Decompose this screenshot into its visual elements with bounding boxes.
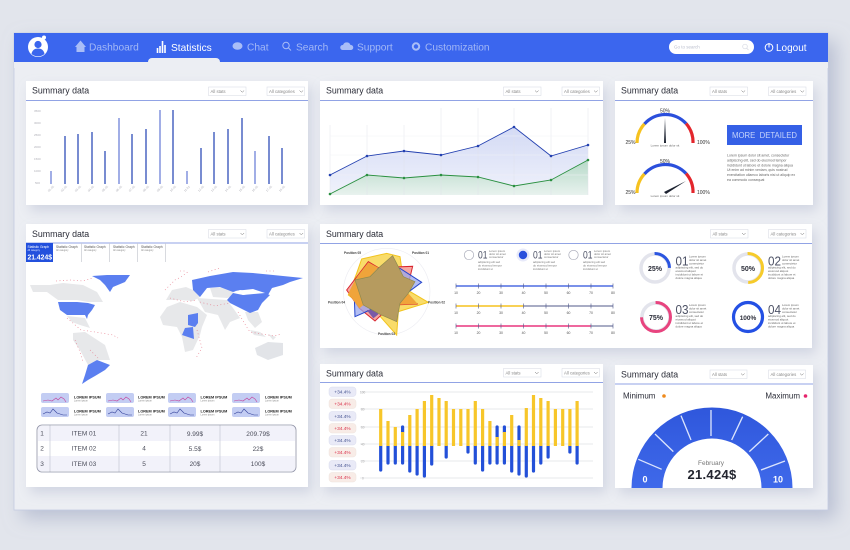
gauge: lower — [626, 159, 710, 198]
donut: 75% — [642, 302, 688, 332]
nav item: Dashboard — [75, 40, 139, 54]
nav item: Chat: Chat — [247, 42, 269, 54]
dropdown: stats: All stats — [712, 372, 727, 377]
stat tabs: All category — [56, 249, 69, 252]
text block: 03: consectetur — [689, 310, 704, 314]
radar chart — [328, 248, 445, 336]
bar chart: yellow and blue: 20 — [361, 460, 365, 464]
sparklines: LOREM IPSUM — [265, 410, 292, 414]
option selectors — [464, 248, 611, 271]
y axis labels: 2500 — [34, 133, 41, 137]
sparklines: LOREM IPSUM — [265, 396, 292, 400]
donut: 25%: 25% — [648, 266, 663, 273]
percentage pills: +34.4% — [334, 438, 351, 444]
option selectors: do eiusmod tempor — [478, 264, 502, 268]
top navigation bar — [14, 33, 828, 68]
radar chart: Position 03 — [378, 332, 395, 336]
button: more detailed: MORE DETAILED — [732, 131, 797, 140]
slider: yellow: 20 — [477, 311, 480, 315]
x axis labels: 15.01 — [238, 184, 246, 193]
stat tabs: Statistic Graph — [113, 245, 135, 249]
legend: maximum: Maximum — [765, 392, 800, 400]
text block: 04: dolor sit amet — [782, 306, 800, 310]
x axis labels: 17.01 — [265, 184, 273, 193]
slider: pink: 60 — [567, 331, 570, 335]
percentage pills — [329, 387, 356, 482]
text block: exercitation ullamco laboris nisi ut aliquip ex — [727, 173, 795, 177]
y axis labels: 3000 — [34, 121, 41, 125]
text block: 04: incididunt ut labore et — [768, 321, 796, 325]
slider: yellow: 80 — [611, 311, 615, 315]
slider: pink: 20 — [477, 331, 480, 335]
sparklines: Lorem ipsum — [200, 400, 214, 402]
text block: 01: consectetur — [689, 262, 704, 266]
text block: 01: incididunt ut labore et — [676, 272, 703, 276]
stat tabs: Statistic Graph — [141, 245, 163, 249]
option selectors: dolor sit amet — [594, 252, 611, 256]
text block: 04: eiusmod aliquot — [768, 318, 788, 322]
percentage pills: +34.4% — [334, 414, 351, 420]
panel: stacked bars — [320, 364, 603, 487]
gauge: lower: 50% — [660, 159, 671, 165]
dropdown: categories: All categories — [564, 370, 590, 376]
text block: 01: dolor sit amet — [689, 258, 707, 262]
text block — [727, 154, 795, 182]
dropdown: categories: All categories — [770, 232, 796, 236]
option selectors: consectetur — [544, 255, 559, 259]
option selectors: incididunt ut — [478, 267, 493, 271]
dropdown: stats: All stats — [506, 370, 521, 376]
option selectors: dolor sit amet — [489, 252, 506, 256]
percentage pills: +34.4% — [334, 463, 351, 469]
donut: 100% — [734, 302, 781, 332]
data table: ITEM 01 — [72, 430, 97, 438]
slider: blue: 30 — [499, 291, 503, 295]
sparklines: Lorem ipsum — [265, 414, 279, 416]
sparklines: Lorem ipsum — [74, 414, 88, 416]
panel: world map and table — [26, 224, 308, 487]
stat tabs: All category — [141, 249, 154, 252]
data table: ITEM 02 — [72, 446, 97, 452]
donut: 50%: 02 — [768, 254, 781, 268]
slider: yellow: 50 — [544, 311, 548, 315]
dropdown: categories: All categories — [269, 89, 295, 94]
text block: ea commodo consequat — [727, 178, 764, 182]
sparklines: LOREM IPSUM — [74, 410, 101, 414]
option selectors: do eiusmod tempor — [533, 264, 557, 268]
option selectors: 01 — [478, 250, 488, 262]
sparklines: LOREM IPSUM — [200, 396, 227, 400]
x axis labels: 06.01 — [115, 184, 123, 193]
bar chart: yellow and blue: 100 — [360, 390, 366, 394]
text block: 03: eiusmod aliquot — [676, 318, 696, 322]
sparklines: LOREM IPSUM — [138, 410, 165, 414]
x axis labels: 14.01 — [224, 184, 232, 193]
x axis labels: 03.01 — [74, 184, 82, 193]
nav item: Customization: Customization — [425, 42, 490, 54]
dropdown: stats — [504, 87, 541, 96]
bar chart: yellow and blue: 80 — [361, 408, 365, 412]
nav item: Support: Support — [357, 42, 393, 54]
sparklines: Lorem ipsum — [200, 414, 214, 416]
world map — [30, 268, 303, 384]
dropdown: stats: All stats — [210, 232, 226, 236]
option selectors: Lorem ipsum — [544, 249, 561, 253]
data table: 2 — [40, 446, 44, 452]
search box: Go to search — [674, 44, 700, 50]
text block: Lorem ipsum dolor sit amet, consectetur — [727, 154, 790, 158]
stat tabs: All category — [28, 249, 41, 252]
option selectors: incididunt ut — [533, 267, 548, 271]
x axis labels: 18.01 — [278, 184, 286, 193]
donut: 100%: 04 — [768, 302, 781, 317]
slider: blue: 60 — [567, 291, 570, 295]
text block: 03: Lorem ipsum — [689, 303, 706, 307]
stat tabs — [26, 243, 166, 262]
slider: yellow — [454, 304, 615, 315]
heading: Summary data — [32, 86, 89, 96]
dropdown: stats: All stats — [712, 89, 727, 94]
data table: 209.79$ — [246, 431, 270, 438]
stat tabs: 21.424$ — [28, 254, 52, 262]
text block: incididunt ut labore et dolore magna aliqua — [727, 163, 793, 167]
panel: area line chart — [320, 81, 603, 205]
heading: Summary data — [326, 229, 383, 239]
sparklines: Lorem ipsum — [138, 400, 152, 402]
dropdown: categories — [267, 87, 304, 96]
x axis labels: 01.01 — [47, 184, 55, 193]
stat tabs: Statistic Graph — [84, 245, 106, 249]
sparklines: LOREM IPSUM — [74, 396, 101, 400]
option selectors: adipiscing elit sed — [478, 260, 501, 264]
gauge: upper: 25% — [626, 140, 636, 146]
donut: 75%: 75% — [649, 315, 664, 322]
x axis labels: 11.01 — [183, 184, 191, 193]
semicircle gauge: 10 — [773, 474, 783, 484]
gauge: lower: Lorem ipsum dolor sit — [651, 194, 680, 198]
search box — [669, 40, 754, 54]
option selectors: do eiusmod tempor — [583, 264, 607, 268]
option selectors: Lorem ipsum — [489, 249, 506, 253]
icon: user avatar — [28, 36, 48, 57]
x axis labels — [47, 184, 286, 193]
button: more detailed — [727, 125, 802, 145]
slider: blue: 40 — [522, 291, 525, 295]
dropdown: stats — [710, 230, 748, 238]
donut: 25% — [640, 254, 688, 282]
dropdown: stats: All stats — [506, 89, 521, 94]
data table — [37, 425, 296, 472]
donut: 50%: 50% — [741, 266, 756, 273]
data table: 5.5$ — [189, 446, 202, 453]
panel: gauges — [615, 81, 813, 205]
slider: pink — [454, 324, 615, 335]
sparklines — [41, 393, 292, 417]
semicircle gauge — [632, 408, 792, 488]
option selectors: 01 — [533, 250, 542, 262]
slider: pink: 40 — [522, 331, 525, 335]
text block: 04: dolore magna aliqua — [768, 324, 795, 328]
stat tabs: All category — [113, 249, 126, 252]
x axis labels: 09.01 — [156, 184, 164, 193]
dropdown: categories: All categories — [564, 89, 590, 94]
semicircle gauge: February — [698, 460, 725, 467]
text block: 02: consectetur — [782, 262, 797, 266]
option selectors: incididunt ut — [583, 267, 598, 271]
nav item: Chat — [232, 42, 269, 54]
text block: Ut enim ad minim veniam, quis nostrud — [727, 168, 788, 172]
dropdown: stats — [710, 370, 747, 378]
slider: yellow: 10 — [454, 311, 458, 315]
percentage pills: +34.4% — [334, 426, 351, 432]
data table: 1 — [40, 430, 44, 438]
option selectors: dolor sit amet — [544, 252, 561, 256]
data table: 4 — [142, 446, 146, 452]
text block: 03: adipiscing elit, sed do — [676, 314, 704, 318]
x axis labels: 07.01 — [128, 184, 136, 193]
gauge: upper: 50% — [660, 108, 671, 114]
slider: pink: 10 — [454, 331, 458, 335]
radar chart: Position 04 — [328, 300, 345, 304]
data table: 21 — [140, 430, 148, 438]
bar chart: yellow and blue: 40 — [361, 442, 365, 446]
text block: 01: adipiscing elit, sed do — [676, 266, 704, 270]
slider: blue: 70 — [589, 291, 593, 295]
option selectors: adipiscing elit sed — [533, 260, 556, 264]
text block: 01: dolore magna aliqua — [676, 276, 702, 280]
semicircle gauge: 21.424$ — [687, 467, 737, 482]
slider: blue: 80 — [611, 291, 615, 295]
x axis labels: 05.01 — [101, 184, 109, 193]
slider: blue: 50 — [544, 291, 548, 295]
text block: 01: eiusmod aliquot — [676, 269, 696, 273]
bars — [51, 110, 282, 184]
heading: Summary data — [621, 370, 678, 380]
text block: 02: dolor sit amet — [782, 258, 800, 262]
text block: adipiscing elit, sed do eiusmod tempor — [727, 158, 787, 162]
text block: 02: dolore magna aliqua — [768, 276, 795, 280]
data table: ITEM 03 — [72, 461, 97, 468]
option selectors: adipiscing elit sed — [583, 260, 606, 264]
legend: minimum: Minimum — [623, 392, 656, 400]
sparklines: Lorem ipsum — [265, 400, 279, 402]
dropdown: categories — [267, 230, 304, 238]
donut: 50% — [734, 254, 781, 282]
gauge: lower: 25% — [626, 190, 636, 196]
percentage pills: +34.4% — [334, 475, 351, 481]
line chart — [329, 108, 589, 195]
semicircle gauge: 0 — [642, 474, 648, 484]
data table: 5 — [142, 461, 146, 468]
dropdown: stats — [208, 87, 246, 96]
slider: yellow: 70 — [589, 311, 593, 315]
data table: 3 — [40, 461, 44, 468]
dropdown: stats — [710, 87, 748, 96]
heading: Summary data — [326, 86, 383, 96]
text block: 02 — [768, 254, 800, 280]
slider: yellow: 60 — [567, 311, 570, 315]
radar chart: Position 02 — [428, 300, 445, 304]
x axis labels: 13.01 — [210, 184, 218, 193]
dropdown: categories: All categories — [770, 89, 796, 94]
y axis labels — [34, 109, 41, 185]
text block: 02: adipiscing elit, sed do — [768, 266, 796, 270]
slider: pink: 80 — [611, 331, 615, 335]
slider: yellow: 30 — [499, 311, 503, 315]
gauge: lower: 100% — [697, 190, 710, 196]
dropdown: categories — [768, 230, 806, 238]
x axis labels: 16.01 — [251, 184, 259, 193]
percentage pills: +34.4% — [334, 402, 351, 408]
option selectors: Lorem ipsum — [594, 249, 611, 253]
nav item: Statistics: Statistics — [171, 43, 212, 54]
gauge: upper: Lorem ipsum dolor sit — [651, 144, 680, 148]
text block: 02: Lorem ipsum — [782, 254, 799, 258]
nav item: Support — [340, 42, 393, 54]
y axis labels: 500 — [35, 181, 40, 185]
stat tabs: Statistic Graph — [28, 245, 49, 249]
option selectors: consectetur — [489, 255, 504, 259]
data table: 20$ — [190, 461, 201, 468]
bar chart: yellow and blue: 0 — [362, 476, 364, 480]
text block: 02: incididunt ut labore et — [768, 272, 796, 276]
sparklines: Lorem ipsum — [138, 414, 152, 416]
x axis labels: 08.01 — [142, 184, 150, 193]
data table: 9.99$ — [187, 431, 204, 438]
stat tabs: Statistic Graph — [56, 245, 78, 249]
y axis labels: 1500 — [34, 157, 41, 161]
slider: blue: 20 — [477, 291, 480, 295]
slider: yellow: 40 — [522, 311, 525, 315]
dropdown: categories — [768, 87, 806, 96]
heading: Summary data — [32, 229, 89, 239]
slider: blue — [454, 284, 615, 295]
logout: Logout — [776, 43, 807, 54]
sparklines: Lorem ipsum — [74, 400, 88, 402]
text block: 01: Lorem ipsum — [689, 254, 706, 258]
text block: 01 — [676, 254, 707, 280]
slider: pink: 30 — [499, 331, 503, 335]
nav item: Statistics — [158, 41, 212, 54]
y axis labels: 3500 — [34, 109, 41, 113]
slider: pink: 50 — [544, 331, 548, 335]
data table: 100$ — [251, 461, 266, 468]
slider: pink: 70 — [589, 331, 593, 335]
heading: Summary data — [621, 86, 678, 96]
gauge: upper — [626, 108, 710, 148]
text block: 03: incididunt ut labore et — [676, 321, 703, 325]
sparklines: LOREM IPSUM — [138, 396, 165, 400]
x axis labels: 10.01 — [169, 184, 177, 193]
percentage pills: +34.4% — [334, 390, 351, 396]
slider: blue: 10 — [454, 291, 458, 295]
option selectors: 01 — [583, 250, 592, 262]
x axis labels: 12.01 — [197, 184, 205, 193]
nav item: Dashboard: Dashboard — [89, 42, 139, 54]
donut: 25%: 01 — [676, 254, 688, 268]
text block: 03: dolore magna aliqua — [676, 324, 702, 328]
x axis labels: 04.01 — [87, 184, 95, 193]
nav item: Search — [283, 42, 328, 54]
text block: 03: dolor sit amet — [689, 306, 707, 310]
heading: Summary data — [326, 368, 383, 378]
text block: 04: adipiscing elit, sed do — [768, 314, 796, 318]
bar chart: yellow and blue: 60 — [361, 426, 365, 430]
text block: 04 — [768, 303, 800, 328]
radar chart: Position 01 — [412, 251, 429, 255]
y axis labels: 2000 — [34, 145, 41, 149]
dropdown: categories — [768, 370, 806, 378]
dropdown: stats: All stats — [210, 89, 226, 94]
panel: semicircle gauge — [615, 365, 813, 488]
data table: 22$ — [253, 446, 264, 453]
text block: 02: eiusmod aliquot — [768, 269, 788, 273]
panel: radar, sliders and donuts — [320, 224, 812, 348]
option selectors: consectetur — [594, 255, 609, 259]
x axis labels: 02.01 — [60, 184, 68, 193]
radar chart: Position 05 — [344, 251, 361, 255]
stat tabs: All category — [84, 249, 97, 252]
bar chart: yellow and blue — [360, 390, 593, 480]
panel: bar chart summary — [26, 81, 308, 205]
donut: 75%: 03 — [676, 302, 688, 317]
dropdown: categories — [562, 368, 600, 377]
text block: 04: Lorem ipsum — [782, 303, 799, 307]
text block: 03 — [676, 303, 707, 328]
dropdown: stats — [504, 368, 541, 377]
nav item: Search: Search — [296, 42, 328, 54]
dropdown: categories: All categories — [269, 232, 295, 236]
text block: 04: consectetur — [782, 310, 797, 314]
dropdown: stats: All stats — [712, 232, 728, 236]
sparklines: LOREM IPSUM — [200, 410, 227, 414]
dropdown: categories — [562, 87, 600, 96]
dropdown: stats — [208, 230, 246, 238]
dropdown: categories: All categories — [770, 372, 796, 377]
y axis labels: 1000 — [34, 169, 41, 173]
gauge: upper: 100% — [697, 140, 710, 146]
donut: 100%: 100% — [740, 315, 757, 322]
percentage pills: +34.4% — [334, 450, 351, 456]
